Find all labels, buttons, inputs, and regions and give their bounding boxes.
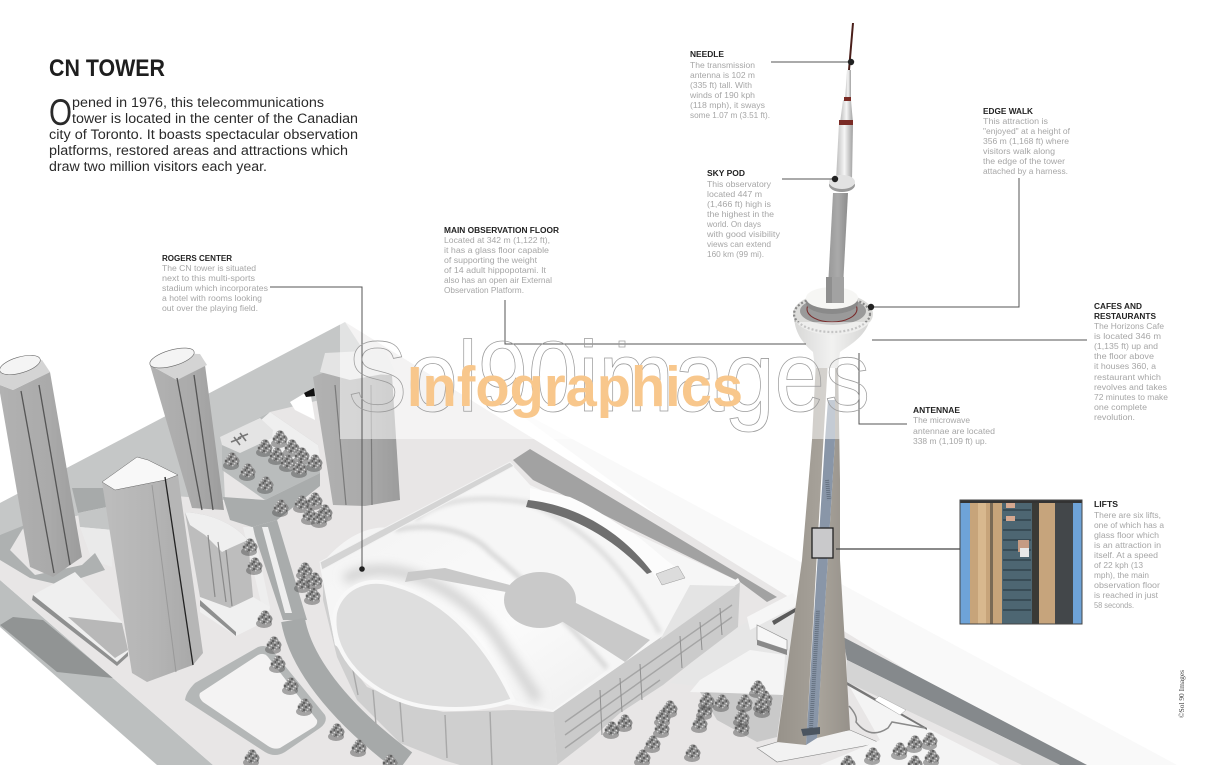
callout: sky pod: This observatory bbox=[707, 179, 772, 189]
main shaft bbox=[777, 360, 850, 745]
callout: sky pod: (1,466 ft) high is bbox=[707, 199, 771, 209]
callout: sky pod: the highest in the bbox=[707, 209, 774, 219]
upper shaft and collar bbox=[826, 193, 848, 303]
callout: main observation floor: Observation Platform. bbox=[444, 285, 524, 295]
callout: rogers center: out over the playing field. bbox=[162, 303, 258, 313]
plazas east of stadium bbox=[670, 593, 1000, 765]
copyright credit: ©Sol 90 Images bbox=[1177, 670, 1186, 718]
callout: antennae bbox=[913, 405, 995, 446]
callout: sky pod: 160 km (99 mi). bbox=[707, 249, 764, 259]
callout: lifts: glass floor which bbox=[1094, 530, 1159, 540]
callout: main observation floor bbox=[444, 225, 560, 295]
callout: rogers center: next to this multi-sports bbox=[162, 273, 255, 283]
callout: cafes and restaurants: is located 346 m bbox=[1094, 331, 1161, 341]
callout: lifts: of 22 kph (13 bbox=[1094, 560, 1143, 570]
callout: cafes and restaurants: it houses 360, a bbox=[1094, 361, 1156, 371]
callout: sky pod: world. On days bbox=[706, 219, 761, 229]
intro paragraph: platforms, restored areas and attractions which bbox=[49, 143, 348, 158]
tower left bbox=[0, 352, 82, 577]
callout: lifts: 58 seconds. bbox=[1094, 600, 1134, 610]
callout: edge walk bbox=[983, 106, 1071, 176]
callout: cafes and restaurants: revolution. bbox=[1094, 412, 1135, 422]
roof crease shading bbox=[345, 499, 660, 700]
callout: sky pod: located 447 m bbox=[707, 189, 762, 199]
parking lot bbox=[185, 646, 326, 755]
callout: edge walk: This attraction is bbox=[983, 116, 1048, 126]
callout: main observation floor: it has a glass floor capable bbox=[444, 245, 549, 255]
callout: rogers center: ROGERS CENTER bbox=[162, 253, 233, 263]
callout: cafes and restaurants: one complete bbox=[1094, 402, 1147, 412]
callout: sky pod: views can extend bbox=[707, 239, 771, 249]
callout: needle: The transmission bbox=[690, 60, 755, 70]
callout: sky pod bbox=[706, 168, 781, 259]
callout: needle: winds of 190 kph bbox=[689, 90, 755, 100]
callout: lifts bbox=[1094, 499, 1164, 610]
callout: lifts: mph), the main bbox=[1094, 570, 1149, 580]
callout: edge walk: attached by a harness. bbox=[983, 166, 1068, 176]
stadium round facade bbox=[323, 565, 557, 765]
callout: main observation floor: MAIN OBSERVATION FLOOR bbox=[444, 225, 560, 235]
watermark text: Sol90images bbox=[347, 321, 870, 433]
callout: sky pod: SKY POD bbox=[707, 168, 745, 178]
callout: needle: antenna is 102 m bbox=[690, 70, 755, 80]
stadium bbox=[320, 462, 740, 765]
callout: main observation floor: of supporting the weight bbox=[444, 255, 538, 265]
ground plane bbox=[0, 322, 1177, 765]
callout: cafes and restaurants: RESTAURANTS bbox=[1094, 311, 1156, 321]
callout: cafes and restaurants bbox=[1094, 301, 1168, 422]
city blocks and roads bbox=[0, 388, 1000, 765]
callout: edge walk: the edge of the tower bbox=[983, 156, 1065, 166]
callout: sky pod: with good visibility bbox=[706, 229, 781, 239]
callout: cafes and restaurants: revolves and takes bbox=[1094, 382, 1167, 392]
lift highlight box bbox=[812, 528, 833, 558]
callout: main observation floor: of 14 adult hippopotami. It bbox=[444, 265, 547, 275]
callout: rogers center bbox=[162, 253, 268, 313]
tower shadow on roof bbox=[405, 568, 650, 662]
callout: needle: some 1.07 m (3.51 ft). bbox=[690, 110, 770, 120]
callout: cafes and restaurants: The Horizons Cafe bbox=[1094, 321, 1164, 331]
callout: edge walk: visitors walk along bbox=[983, 146, 1055, 156]
upper observation pod bbox=[793, 287, 873, 368]
callout: lifts: observation floor bbox=[1094, 580, 1160, 590]
callout: lifts: one of which has a bbox=[1094, 520, 1164, 530]
stadium long facade bbox=[551, 578, 740, 765]
CN Tower bbox=[777, 23, 873, 745]
callout: antennae: antennae are located bbox=[913, 426, 995, 436]
callout: needle: NEEDLE bbox=[690, 49, 724, 59]
plaza behind stadium road bbox=[220, 412, 320, 500]
callout: lifts: LIFTS bbox=[1094, 499, 1118, 509]
callout: lifts: is reached in just bbox=[1094, 590, 1159, 600]
callout: cafes and restaurants: restaurant which bbox=[1094, 372, 1161, 382]
callout: rogers center: The CN tower is situated bbox=[162, 263, 256, 273]
callout: antennae: The microwave bbox=[913, 415, 970, 425]
leader lines and markers bbox=[270, 59, 1087, 572]
callout: edge walk: 356 m (1,168 ft) where bbox=[983, 136, 1069, 146]
callout: antennae: ANTENNAE bbox=[913, 405, 960, 415]
callout: edge walk: "enjoyed" at a height of bbox=[983, 126, 1071, 136]
tower back bbox=[148, 344, 224, 510]
callout: needle: (335 ft) tall. With bbox=[690, 80, 752, 90]
callout: cafes and restaurants: the floor above bbox=[1094, 351, 1154, 361]
sky pod bbox=[829, 123, 855, 192]
callout: edge walk: EDGE WALK bbox=[983, 106, 1034, 116]
white watermark panel bbox=[340, 322, 871, 439]
intro paragraph: tower is located in the center of the Canadian bbox=[72, 111, 358, 126]
trees bbox=[223, 430, 939, 765]
callout: rogers center: stadium which incorporates bbox=[162, 283, 268, 293]
callout: main observation floor: also has an open air External bbox=[444, 275, 552, 285]
lifts photo bbox=[960, 500, 1082, 624]
tower right bbox=[313, 350, 400, 506]
roof rail bbox=[320, 462, 514, 570]
callout: cafes and restaurants: 72 minutes to make bbox=[1094, 392, 1168, 402]
watermark text: Infographics bbox=[407, 355, 743, 419]
antenna mast and red bands bbox=[839, 23, 854, 125]
intro paragraph: draw two million visitors each year. bbox=[49, 159, 267, 174]
callout: cafes and restaurants: CAFES AND bbox=[1094, 301, 1142, 311]
callout: lifts: is an attraction in bbox=[1094, 540, 1161, 550]
intro paragraph: city of Toronto. It boasts spectacular observation bbox=[49, 127, 358, 142]
intro paragraph: pened in 1976, this telecommunications bbox=[72, 95, 324, 110]
tower front bbox=[102, 457, 203, 682]
callout: lifts: itself. At a speed bbox=[1094, 550, 1158, 560]
callout: antennae: 338 m (1,109 ft) up. bbox=[913, 436, 987, 446]
callout: main observation floor: Located at 342 m (1,122 ft), bbox=[444, 235, 550, 245]
intro paragraph bbox=[49, 92, 358, 174]
callout: rogers center: a hotel with rooms looking bbox=[162, 293, 262, 303]
title: CN TOWER bbox=[49, 55, 165, 82]
callout: needle bbox=[689, 49, 770, 120]
callout: cafes and restaurants: (1,135 ft) up and bbox=[1094, 341, 1158, 351]
intro paragraph: O bbox=[49, 92, 72, 133]
callout: lifts: There are six lifts, bbox=[1094, 510, 1161, 520]
hotel building bbox=[185, 512, 253, 608]
stadium roof bbox=[320, 465, 740, 712]
callout: needle: (118 mph), it sways bbox=[690, 100, 765, 110]
